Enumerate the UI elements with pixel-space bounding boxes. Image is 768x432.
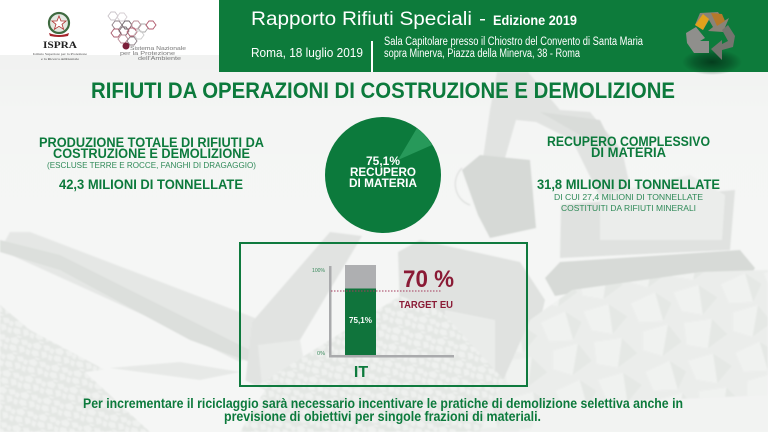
header title: Rapporto Rifiuti Speciali (251, 9, 472, 30)
bar chart: Italy vs target: 0% (317, 351, 326, 357)
right text block: overall recovery: DI CUI 27,4 MILIONI DI TONNELLATE (554, 192, 703, 202)
panel: EU target chart (240, 243, 527, 386)
right text block: overall recovery: DI MATERIA (591, 145, 666, 160)
target value (399, 266, 454, 311)
logo: ISPRA: ISPRA (43, 40, 78, 50)
logo: Sistema Nazionale per la Protezione dell'Ambiente: dell'Ambiente (138, 56, 181, 62)
bar chart: Italy vs target: IT (354, 364, 368, 381)
logo: Sistema Nazionale per la Protezione dell'Ambiente (108, 12, 186, 62)
left text block: total production: PRODUZIONE TOTALE DI RIFIUTI DA (39, 135, 264, 150)
target value: TARGET EU (399, 300, 453, 311)
pie chart: material recovery: DI MATERIA (349, 178, 417, 190)
header dash and edition: Edizione 2019 (493, 13, 577, 28)
left text block: total production (39, 135, 264, 192)
bar chart: Italy vs target (312, 265, 454, 381)
logo: Sistema Nazionale per la Protezione dell'Ambiente: Sistema Nazionale (130, 46, 186, 52)
header divider (371, 41, 373, 72)
header date: Roma, 18 luglio 2019 (251, 46, 363, 60)
icon: recycle symbol (686, 12, 735, 60)
closing note (83, 396, 683, 424)
bar chart: Italy vs target: 100% (312, 268, 326, 274)
header white logo band (0, 0, 219, 55)
left text block: total production: 42,3 MILIONI DI TONNELLATE (59, 177, 243, 192)
right text block: overall recovery (537, 134, 720, 213)
title: RIFIUTI DA OPERAZIONI DI COSTRUZIONE E DEMOLIZIONE (91, 78, 675, 103)
right text block: overall recovery: 31,8 MILIONI DI TONNELLATE (537, 177, 720, 192)
left text block: total production: COSTRUZIONE E DEMOLIZIONE (53, 146, 250, 161)
header venue (384, 36, 643, 60)
closing note: previsione di obiettivi per singole frazioni di materiali. (224, 409, 541, 424)
left text block: total production: (ESCLUSE TERRE E ROCCE, FANGHI DI DRAGAGGIO) (47, 160, 256, 170)
right text block: overall recovery: COSTITUITI DA RIFIUTI MINERALI (561, 203, 696, 213)
pie chart: material recovery: RECUPERO (350, 167, 416, 179)
header venue: Sala Capitolare presso il Chiostro del Convento di Santa Maria (384, 36, 643, 48)
right text block: overall recovery: RECUPERO COMPLESSIVO (547, 134, 710, 149)
bar chart: Italy vs target: 75,1% (349, 316, 372, 325)
pie chart: material recovery: 75,1% (366, 156, 400, 168)
target value: 70 % (403, 266, 454, 293)
logo: ISPRA: Istituto Superiore per la Protezione (33, 52, 88, 56)
pie chart: material recovery (325, 117, 441, 233)
header venue: sopra Minerva, Piazza della Minerva, 38 - Roma (384, 48, 580, 60)
header green banner (219, 0, 768, 72)
logo: Sistema Nazionale per la Protezione dell'Ambiente: per la Protezione (120, 51, 175, 57)
logo: ISPRA: e la Ricerca Ambientale (41, 57, 80, 61)
closing note: Per incrementare il riciclaggio sarà necessario incentivare le pratiche di demolizione selettiva anche in (83, 396, 683, 411)
icon: recycle symbol shadow (682, 49, 742, 75)
logo: ISPRA (33, 13, 88, 61)
